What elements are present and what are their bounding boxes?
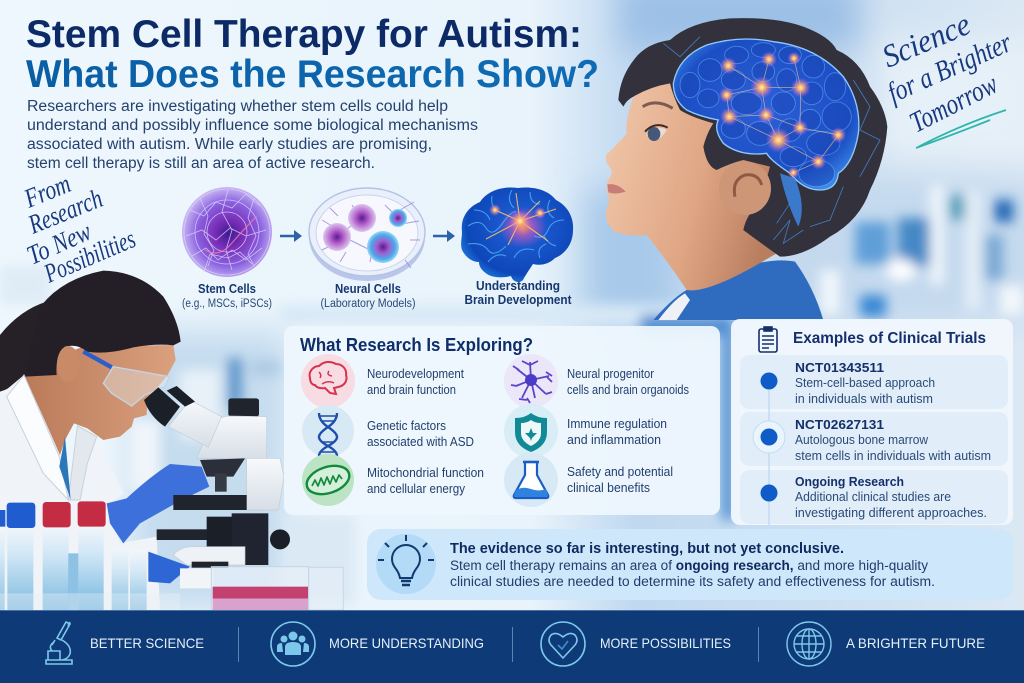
item: flask: Safety and potential — [567, 465, 673, 479]
trial: ongoing research: Ongoing Research — [795, 474, 904, 489]
handwritten note: from research to new possibilities: Research — [23, 183, 107, 240]
icon: clipboard — [759, 327, 777, 352]
glove: lower hand — [148, 552, 190, 583]
handwritten note: from research to new possibilities: From — [19, 168, 75, 214]
hair — [25, 271, 181, 377]
lab coat — [0, 375, 160, 610]
callout: evidence summary — [367, 529, 1013, 600]
item: DNA: Genetic factors — [367, 419, 446, 433]
intro text: stem cell therapy is still an area of active research. — [27, 155, 375, 172]
label: understanding brain development: Understanding — [476, 279, 560, 293]
label: understanding brain development — [464, 279, 572, 307]
trial: ongoing research: investigating different approaches. — [795, 506, 987, 520]
handwritten note: from research to new possibilities: To New — [22, 216, 96, 270]
hair — [618, 18, 887, 257]
mouth — [607, 184, 626, 194]
test tubes — [0, 501, 180, 610]
intro text: understand and possibly influence some biological mechanisms — [27, 117, 478, 134]
title: Stem Cell Therapy for Autism: — [26, 13, 582, 56]
petri dishes with pink medium — [211, 567, 343, 610]
item: DNA: associated with ASD — [367, 435, 474, 449]
ponytail — [0, 302, 50, 392]
label: more understanding: MORE UNDERSTANDING — [329, 635, 484, 651]
ear — [57, 346, 80, 382]
icon: stem cell — [182, 187, 272, 277]
intro text: Researchers are investigating whether stem cells could help — [27, 98, 448, 115]
item: neuron — [504, 354, 689, 408]
arrow: stem cells to neural cells — [280, 230, 302, 242]
trial: NCT02627131: NCT02627131 — [795, 417, 884, 432]
handwritten slogan: science for a brighter tomorrow — [877, 5, 1017, 148]
item: mitochondrion — [302, 454, 484, 506]
label: neural cells: (Laboratory Models) — [320, 298, 416, 310]
title: What Does the Research Show? — [26, 53, 599, 96]
trial: NCT01343511: NCT01343511 — [795, 360, 884, 375]
icon: heart — [541, 622, 585, 666]
icon: petri dish with neural cells — [309, 188, 425, 281]
item: neuron: cells and brain organoids — [567, 383, 689, 397]
brain — [663, 37, 880, 243]
boy portrait with glowing brain — [606, 18, 887, 320]
handwritten slogan: science for a brighter tomorrow: Tomorrow — [905, 68, 1003, 139]
intro text — [27, 98, 478, 172]
callout text: clinical studies are needed to determine its safety and effectiveness for autism. — [450, 574, 935, 589]
label: stem cells: (e.g., MSCs, iPSCs) — [182, 298, 272, 310]
item: mitochondrion: Mitochondrial function — [367, 466, 484, 480]
trial: NCT02627131: stem cells in individuals with autism — [795, 449, 991, 463]
item: brain — [301, 354, 464, 408]
panel: examples of clinical trials — [731, 319, 1013, 525]
trial: NCT02627131: Autologous bone marrow — [795, 433, 929, 447]
label: stem cells — [182, 282, 272, 310]
callout text: Stem cell therapy remains an area of ongoing research, and more high-quality — [450, 558, 928, 573]
trial: NCT01343511: in individuals with autism — [795, 392, 933, 406]
item: flask — [504, 453, 673, 507]
callout text — [450, 541, 935, 589]
callout text: The evidence so far is interesting, but not yet conclusive. — [450, 541, 844, 557]
goggles — [83, 352, 169, 406]
item: mitochondrion: and cellular energy — [367, 482, 466, 496]
neck and face — [606, 77, 790, 290]
handwritten note: from research to new possibilities: Possibilities — [39, 223, 140, 289]
ear — [719, 162, 771, 215]
label: stem cells: Stem Cells — [198, 282, 256, 296]
glove: upper hand — [107, 464, 209, 543]
shirt — [653, 260, 823, 320]
trial: NCT01343511: Stem-cell-based approach — [795, 376, 935, 390]
handwritten slogan: science for a brighter tomorrow: Science — [877, 5, 975, 74]
trial: NCT02627131 — [795, 417, 991, 463]
eye — [643, 103, 673, 141]
arrow: neural cells to brain — [433, 230, 455, 242]
heading: Examples of Clinical Trials — [793, 330, 986, 347]
microscope — [144, 386, 290, 588]
trial: NCT01343511 — [795, 360, 935, 406]
label: understanding brain development: Brain Development — [464, 293, 572, 307]
trial: ongoing research: Additional clinical studies are — [795, 490, 951, 504]
label: more possibilities: MORE POSSIBILITIES — [600, 635, 731, 651]
item: shield: Immune regulation — [567, 417, 667, 431]
heading: What Research Is Exploring? — [300, 335, 533, 355]
title — [26, 13, 599, 96]
item: brain: Neurodevelopment — [367, 367, 464, 381]
item: neuron: Neural progenitor — [567, 367, 654, 381]
icon: light bulb — [376, 534, 436, 594]
icon: globe — [787, 622, 831, 666]
footer banner — [0, 610, 1024, 683]
blue scrubs — [59, 437, 71, 500]
row backgrounds — [740, 355, 1008, 524]
scientist at microscope — [0, 271, 209, 610]
icon: microscope — [46, 622, 72, 664]
icon: glowing brain — [461, 188, 573, 282]
intro text: associated with autism. While early studies are promising, — [27, 136, 432, 153]
trial: ongoing research — [795, 474, 987, 520]
label: a brighter future: A BRIGHTER FUTURE — [846, 635, 985, 651]
item: brain: and brain function — [367, 383, 456, 397]
item: shield — [504, 404, 667, 458]
item: flask: clinical benefits — [567, 481, 650, 495]
timeline — [753, 372, 785, 525]
icon: people — [271, 622, 315, 666]
label: better science: BETTER SCIENCE — [90, 635, 204, 651]
handwritten note: from research to new possibilities — [19, 168, 140, 289]
item: shield: and inflammation — [567, 433, 661, 447]
face and neck — [23, 345, 176, 460]
panel: what research is exploring — [284, 326, 720, 515]
label: neural cells — [320, 282, 416, 310]
label: neural cells: Neural Cells — [335, 282, 401, 296]
item: DNA — [302, 405, 474, 457]
